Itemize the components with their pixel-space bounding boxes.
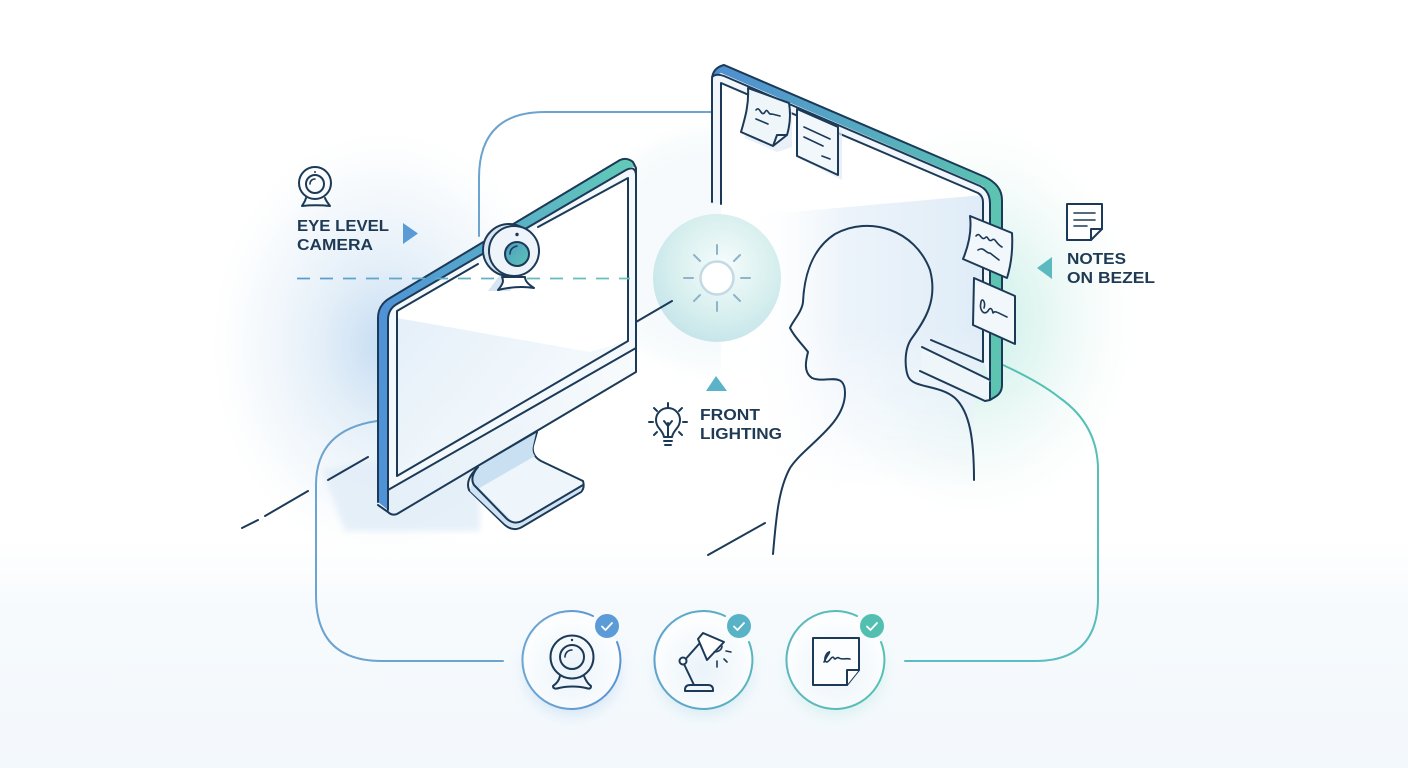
arrow: up (706, 376, 727, 391)
icon: note (1067, 204, 1102, 240)
note: top left curled (741, 88, 792, 152)
screen reflection (397, 318, 628, 476)
back monitor screen (721, 142, 983, 374)
webcam on monitor (483, 224, 539, 291)
back monitor frame (983, 178, 1002, 400)
heading: front lighting: LIGHTING (700, 426, 782, 443)
sticky notes on back monitor (741, 88, 1015, 344)
light beam line (636, 301, 672, 322)
eye level dashed line (297, 278, 630, 280)
icon: webcam (299, 167, 331, 206)
badge: check (860, 614, 884, 638)
item: note check (786, 611, 884, 714)
heading: notes on bezel: NOTES (1067, 251, 1126, 268)
monitor screen (397, 178, 628, 476)
label: notes on bezel (1037, 204, 1155, 287)
front monitor (378, 159, 636, 529)
heading: eye level camera: CAMERA (297, 237, 373, 254)
monitor body (378, 159, 636, 515)
monitor chin (388, 348, 636, 514)
icon: webcam (550, 636, 594, 689)
icon: light bulb (649, 403, 687, 445)
connector lines (316, 112, 1098, 661)
item: lamp check (654, 611, 752, 714)
floor lines (242, 457, 765, 555)
heading: eye level camera: EYE LEVEL (297, 218, 389, 235)
icon: desk lamp (680, 633, 731, 691)
monitor outlines (378, 159, 636, 515)
sun light disc (653, 214, 781, 342)
monitor blue to teal bezel strip (378, 159, 636, 510)
note: right handwritten (963, 216, 1012, 278)
label: eye level camera (297, 167, 418, 254)
note: right signature (973, 278, 1015, 344)
person silhouette (773, 226, 974, 554)
heading: notes on bezel: ON BEZEL (1067, 270, 1155, 287)
label: front lighting (649, 376, 782, 445)
arrow: left (1037, 257, 1052, 279)
item: webcam check (522, 611, 620, 714)
heading: front lighting: FRONT (700, 407, 760, 424)
checklist row (522, 611, 884, 714)
badge: check (727, 614, 751, 638)
monitor stand (468, 432, 584, 529)
back monitor (711, 64, 1003, 418)
icon: signed note (813, 638, 859, 685)
badge: check (595, 614, 619, 638)
note: top lined (797, 109, 842, 180)
arrow: right (403, 223, 418, 244)
